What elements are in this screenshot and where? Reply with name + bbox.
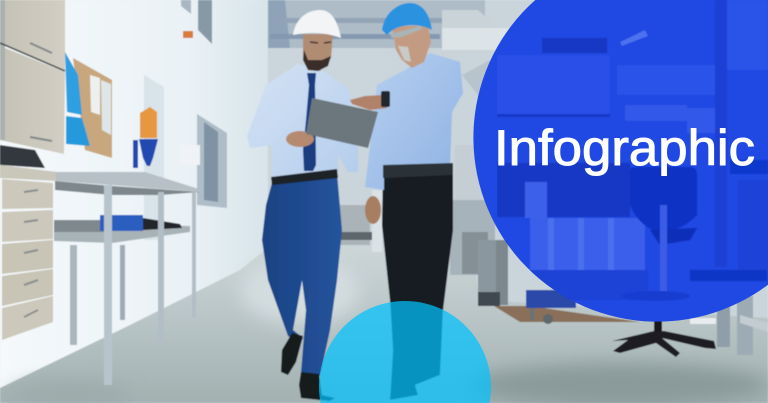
- hand under laptop: [286, 131, 314, 147]
- left wall: [0, 0, 268, 390]
- steel table: [54, 172, 202, 385]
- doorway: [144, 75, 164, 240]
- neck and face: [303, 34, 333, 71]
- safety glasses: [390, 26, 422, 38]
- wall dispenser: [120, 107, 158, 170]
- black trousers: [382, 174, 453, 400]
- corkboard and notices: [73, 58, 112, 158]
- floor: [0, 246, 768, 403]
- blue first aid bags: [65, 52, 90, 146]
- grey beard: [398, 46, 411, 62]
- back room shelving: [336, 190, 382, 252]
- shelving legs: [690, 296, 768, 355]
- faded machinery inside circle: [497, 0, 768, 301]
- blue hard hat: [382, 3, 432, 35]
- front shoe: [299, 372, 335, 401]
- trousers: [262, 173, 342, 376]
- upper cabinets: [0, 0, 65, 154]
- tie: [303, 73, 316, 171]
- pointing hand: [350, 95, 387, 110]
- high window and orange alarm: [181, 0, 212, 44]
- watch: [381, 91, 390, 107]
- belt: [271, 169, 338, 185]
- stool base: [612, 318, 716, 357]
- belt: [383, 163, 453, 178]
- shirt: [365, 53, 463, 190]
- clutter on counter: [0, 145, 45, 168]
- white hard hat: [293, 10, 341, 38]
- rear shoe: [281, 333, 303, 375]
- eyebrows: [310, 42, 331, 43]
- right machinery: [442, 10, 510, 306]
- man on the left: [247, 10, 358, 401]
- cart, mat and wheel: [494, 290, 640, 324]
- big blue circle: [473, 0, 768, 322]
- face: [392, 26, 431, 68]
- drawer unit: [0, 165, 57, 340]
- shirt: [247, 64, 358, 180]
- cyan circle: [319, 301, 491, 403]
- floor shading: [10, 256, 768, 403]
- man on the right: [306, 3, 463, 400]
- wall window: [180, 114, 227, 208]
- hanging hand: [365, 196, 381, 224]
- title text: Infographic: [494, 120, 755, 176]
- laptop: [306, 98, 378, 148]
